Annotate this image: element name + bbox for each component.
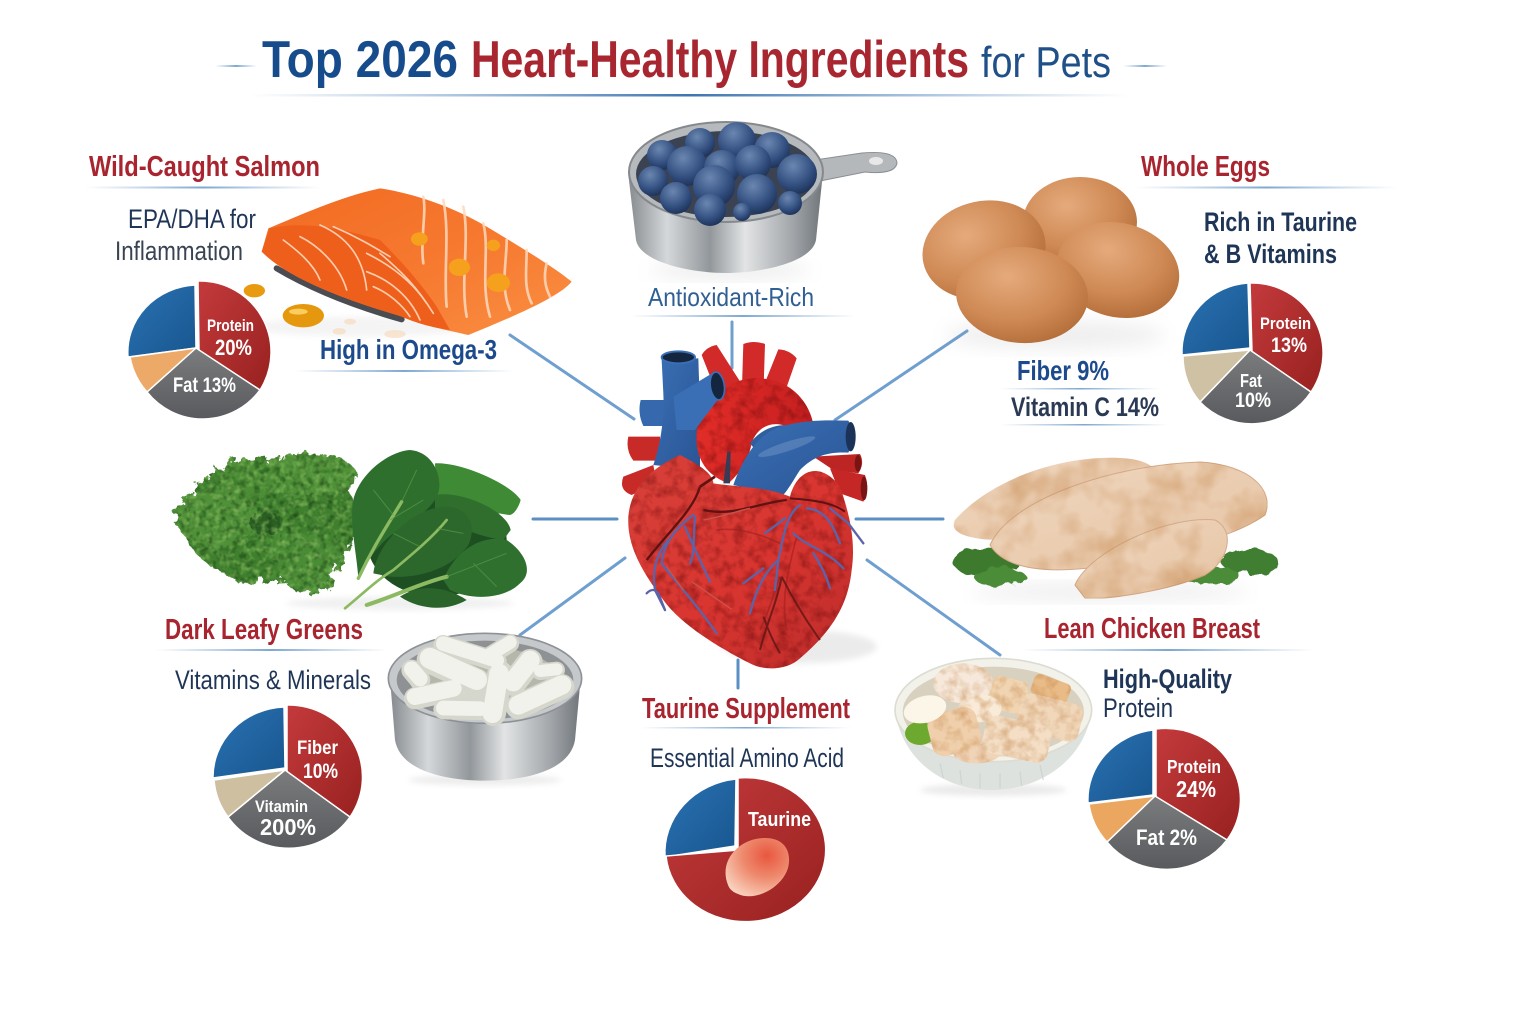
pie chart: eggs: Protein [1260, 314, 1311, 333]
text: high-quality protein: Protein [1103, 693, 1173, 723]
pie chart: eggs: Fat [1240, 371, 1262, 391]
pie chart: chicken [1088, 728, 1240, 869]
heading: salmon: Wild-Caught Salmon [89, 151, 320, 183]
icon: eggs [913, 177, 1190, 349]
icon: gel capsule [726, 838, 789, 896]
text: taurine and B vitamins [1204, 207, 1357, 269]
text: essential amino acid: Essential Amino Acid [650, 743, 844, 773]
pie chart: salmon: Fat 13% [173, 374, 236, 397]
text: taurine and B vitamins: & B Vitamins [1204, 239, 1337, 269]
icon: salmon fillet [244, 188, 572, 338]
panel: taurine supplement [640, 693, 852, 922]
pie chart: greens: 200% [260, 814, 316, 840]
text: EPA/DHA [115, 204, 256, 266]
pie chart: chicken: 24% [1176, 776, 1216, 802]
text: vitamins and minerals: Vitamins & Minerals [175, 665, 371, 695]
pie chart: chicken: Protein [1167, 757, 1221, 777]
heading: taurine supplement: Taurine Supplement [642, 693, 850, 725]
text: antioxidant-rich: Antioxidant-Rich [648, 282, 814, 312]
pie chart: taurine: Taurine [748, 809, 811, 831]
pie chart: taurine [665, 778, 826, 922]
panel: lean chicken breast [895, 458, 1314, 869]
pie chart: greens [213, 705, 362, 848]
callout: high in omega-3: High in Omega-3 [320, 334, 497, 365]
panel: dark leafy greens [155, 450, 527, 848]
pie chart: greens: 10% [303, 760, 338, 783]
text: taurine and B vitamins: Rich in Taurine [1204, 207, 1357, 237]
heart illustration [622, 342, 877, 668]
heading: lean chicken breast: Lean Chicken Breast [1044, 613, 1260, 645]
pie chart: eggs [1182, 283, 1323, 424]
icon: bowl of chicken pieces [895, 658, 1092, 796]
title: Top 2026 [262, 31, 458, 89]
title [215, 31, 1167, 96]
pie chart: eggs: 13% [1271, 334, 1307, 357]
icon: blueberries in steel cup [628, 122, 897, 278]
callout: vitamin C: Vitamin C 14% [1011, 392, 1159, 422]
panel: taurine capsules bowl [388, 633, 582, 785]
panel: whole eggs [913, 151, 1397, 426]
panel: blueberries [628, 122, 897, 317]
heading: dark leafy greens: Dark Leafy Greens [165, 614, 363, 646]
text: high-quality protein [1103, 664, 1232, 723]
pie chart: greens: Fiber [297, 738, 339, 759]
pie chart: salmon: Protein [207, 316, 254, 335]
pie chart: eggs: 10% [1235, 389, 1271, 412]
pie chart: salmon [128, 281, 271, 419]
text: high-quality protein: High-Quality [1103, 664, 1232, 694]
icon: kale and spinach [175, 450, 527, 610]
title: Heart-Healthy Ingredients [471, 31, 969, 89]
text: EPA/DHA: Inflammation [115, 236, 243, 266]
text: EPA/DHA: EPA/DHA for [128, 204, 256, 234]
pie chart: chicken: Fat 2% [1136, 825, 1197, 850]
panel: wild-caught salmon [85, 151, 572, 419]
icon: chicken breast slices [953, 458, 1278, 600]
heading: whole eggs: Whole Eggs [1141, 151, 1270, 183]
callout: fiber: Fiber 9% [1017, 355, 1109, 386]
connector lines [510, 322, 1000, 688]
title: for Pets [981, 38, 1111, 87]
pie chart: greens: Vitamin [255, 797, 308, 816]
pie chart: salmon: 20% [215, 335, 252, 360]
